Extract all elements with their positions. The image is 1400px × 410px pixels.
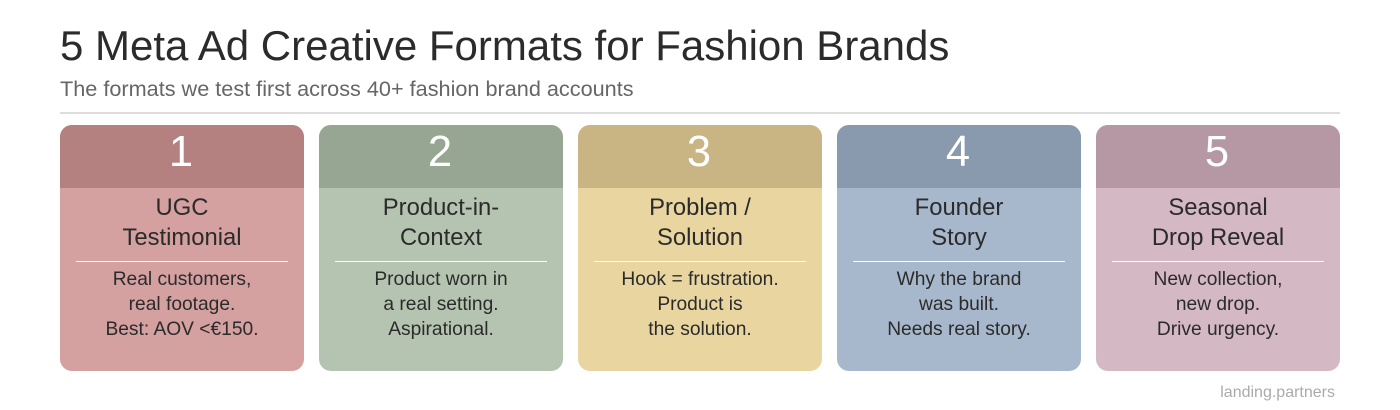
text: UGC description: Real customers,: [113, 269, 251, 290]
heading: Product-in-Context: [383, 194, 499, 251]
title: 5 Meta Ad Creative Formats for Fashion Brands: [60, 22, 949, 69]
subtitle: The formats we test first across 40+ fashion brand accounts: [60, 76, 634, 101]
heading: Product-in-Context: Product-in-: [383, 194, 499, 221]
heading: Problem / Solution: Problem /: [649, 194, 751, 221]
heading: UGC Testimonial: Testimonial: [122, 224, 242, 251]
panel: UGC Testimonial: [60, 125, 304, 371]
number 3: 3: [687, 128, 711, 176]
heading: Founder Story: [915, 194, 1003, 251]
text: UGC description: Best: AOV <€150.: [105, 319, 259, 340]
number 4: 4: [946, 128, 970, 176]
text: Seasonal description: New collection,: [1153, 269, 1283, 290]
text: Founder description: [887, 269, 1031, 340]
number 5: 5: [1205, 128, 1229, 176]
heading: Product-in-Context: Context: [400, 224, 482, 251]
text: Problem description: Product is: [657, 294, 743, 315]
text: Seasonal description: new drop.: [1176, 294, 1260, 315]
text: Product description: Aspirational.: [388, 319, 494, 340]
text: UGC description: [105, 269, 259, 340]
text: Seasonal description: Drive urgency.: [1157, 319, 1279, 340]
heading: Seasonal Drop Reveal: Seasonal: [1168, 194, 1268, 221]
heading: Seasonal Drop Reveal: [1152, 194, 1284, 251]
heading: Seasonal Drop Reveal: Drop Reveal: [1152, 224, 1284, 251]
number 1: 1: [169, 128, 193, 176]
heading: Founder Story: Story: [931, 224, 987, 251]
text: Founder description: Needs real story.: [887, 319, 1031, 340]
text: Founder description: Why the brand: [897, 269, 1021, 290]
heading: UGC Testimonial: UGC: [156, 194, 208, 221]
panel: Founder Story: [837, 125, 1081, 371]
text: UGC description: real footage.: [129, 294, 235, 315]
panel: Seasonal Drop Reveal: [1096, 125, 1340, 371]
text: Problem description: [621, 269, 779, 340]
panel: Problem / Solution: [578, 125, 822, 371]
text: Problem description: Hook = frustration.: [621, 269, 779, 290]
text: Problem description: the solution.: [648, 319, 752, 340]
heading: Founder Story: Founder: [915, 194, 1003, 221]
text: Product description: a real setting.: [383, 294, 499, 315]
heading: Problem / Solution: [649, 194, 751, 251]
number 2: 2: [428, 128, 452, 176]
panel: Product-in-Context: [319, 125, 563, 371]
text: Product description: Product worn in: [374, 269, 508, 290]
text: Seasonal description: [1153, 269, 1283, 340]
heading: UGC Testimonial: [122, 194, 242, 251]
footer credit: landing.partners: [1220, 384, 1335, 401]
text: Product description: [374, 269, 508, 340]
heading: Problem / Solution: Solution: [657, 224, 743, 251]
text: Founder description: was built.: [919, 294, 999, 315]
